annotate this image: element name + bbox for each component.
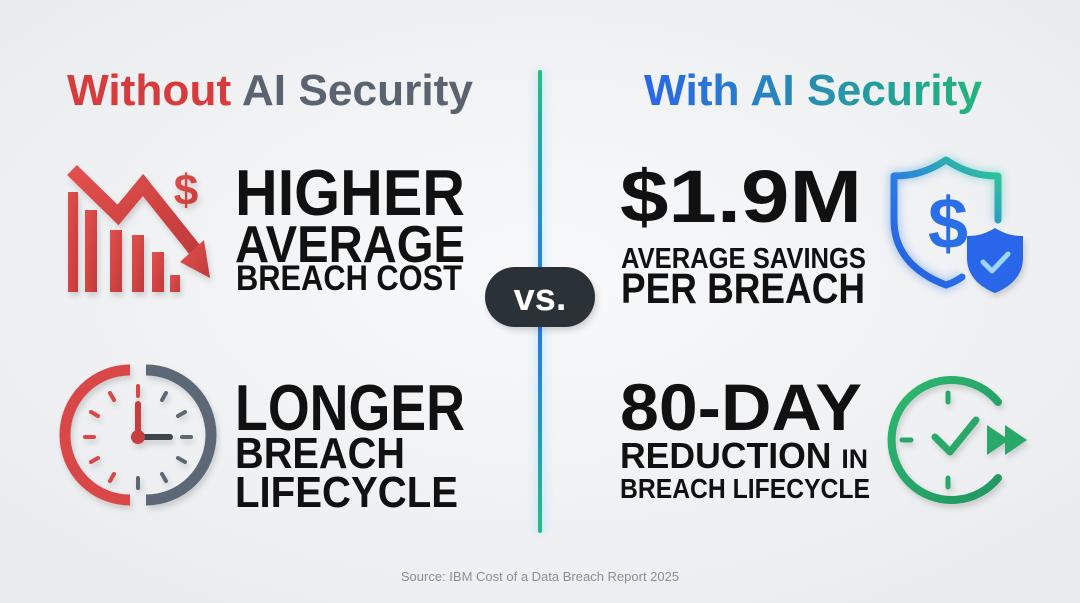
text: higher average breach cost: BREACH COST [236,259,462,298]
text: 80-day reduction [620,370,870,504]
text: $1.9M savings: $1.9M [620,155,862,238]
icon: falling chart with dollar: $ [174,166,198,215]
text: longer breach lifecycle: LIFECYCLE [235,468,458,517]
text: 80-day reduction: BREACH LIFECYCLE [620,473,870,504]
divider line [534,70,546,533]
text: higher average breach cost: HIGHER [235,156,465,229]
text: higher average breach cost [235,156,465,298]
source note: Source: IBM Cost of a Data Breach Report 2025 [401,569,679,584]
text: longer breach lifecycle: BREACH [235,429,405,478]
icon: green clock with fast-forward [892,380,1027,500]
icon: shield with dollar: $ [928,184,968,264]
text: $1.9M savings: AVERAGE SAVINGS [621,243,866,275]
text: $1.9M savings: PER BREACH [621,265,865,313]
text: higher average breach cost: AVERAGE [235,216,465,274]
icon: shield with dollar [894,160,1023,293]
text: longer breach lifecycle [235,371,465,517]
heading: without: Without AI Security [67,66,474,115]
text: 80-day reduction: REDUCTION IN [620,435,868,476]
icon: falling chart with dollar [68,166,210,292]
vs badge: vs. [514,277,566,319]
text: longer breach lifecycle: LONGER [235,371,465,444]
text: $1.9M savings [620,155,866,313]
vs badge [485,267,595,327]
heading: with: With AI Security [644,66,983,115]
text: 80-day reduction: 80-DAY [620,370,862,444]
icon: red clock [65,370,211,500]
